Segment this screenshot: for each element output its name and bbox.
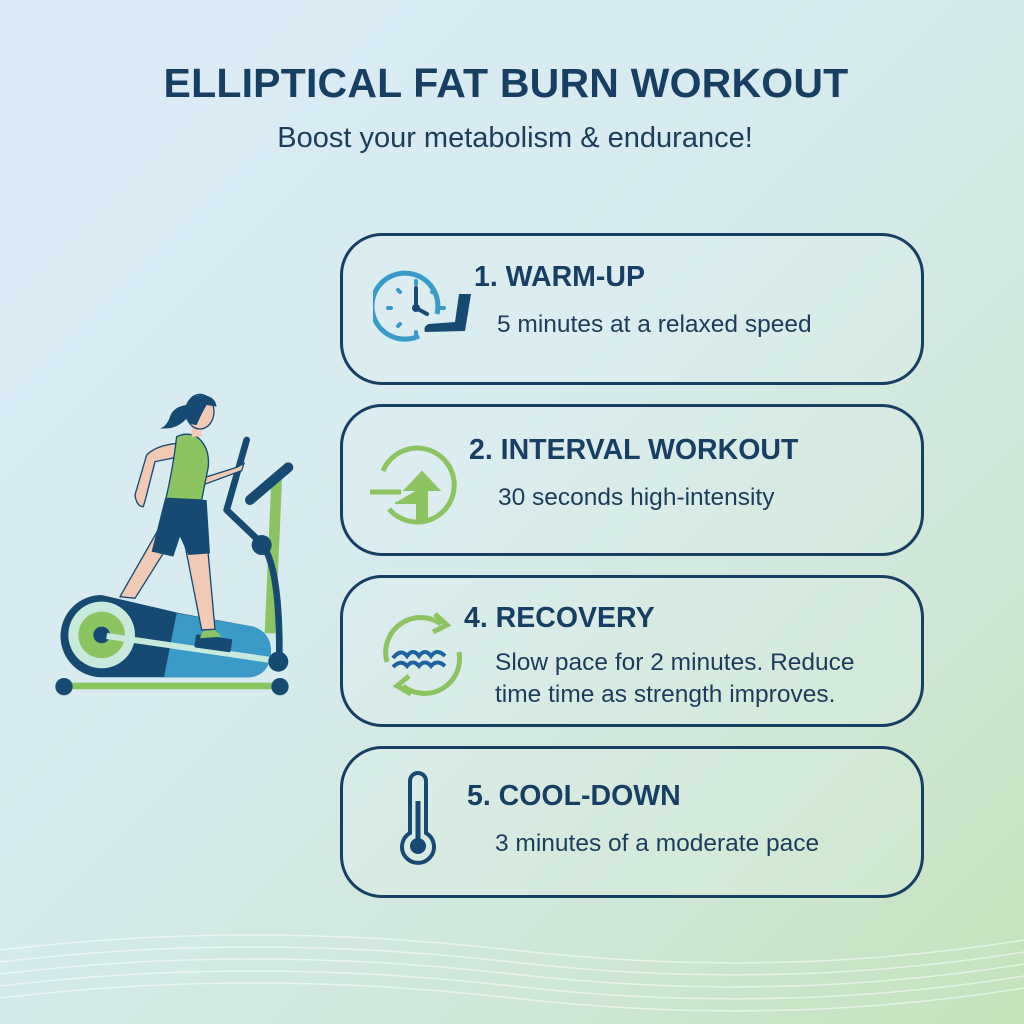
illustration: woman on elliptical bbox=[55, 394, 294, 696]
icon: thermometer bbox=[400, 771, 436, 865]
heading: 1. WARM-UP bbox=[474, 261, 645, 293]
icon: recovery cycle bbox=[383, 612, 462, 696]
description: 30 seconds high-intensity bbox=[498, 484, 774, 511]
title: ELLIPTICAL FAT BURN WORKOUT bbox=[164, 60, 848, 106]
heading: 5. COOL-DOWN bbox=[467, 780, 681, 812]
card: interval bbox=[340, 404, 924, 556]
subtitle: Boost your metabolism & endurance! bbox=[277, 122, 753, 154]
card: cool-down bbox=[340, 746, 924, 898]
description: 5 minutes at a relaxed speed bbox=[497, 311, 812, 338]
icon: arrow up bbox=[370, 446, 457, 525]
heading: 4. RECOVERY bbox=[464, 602, 655, 634]
description: Slow pace for 2 minutes. Reduce bbox=[495, 649, 855, 676]
description: time time as strength improves. bbox=[495, 681, 835, 708]
icon: clock bbox=[373, 270, 471, 342]
heading: 2. INTERVAL WORKOUT bbox=[469, 434, 798, 466]
decorative waves bbox=[0, 934, 1024, 1012]
card: warm-up bbox=[340, 233, 924, 385]
description: 3 minutes of a moderate pace bbox=[495, 830, 819, 857]
description bbox=[495, 649, 855, 708]
card: recovery bbox=[340, 575, 924, 727]
